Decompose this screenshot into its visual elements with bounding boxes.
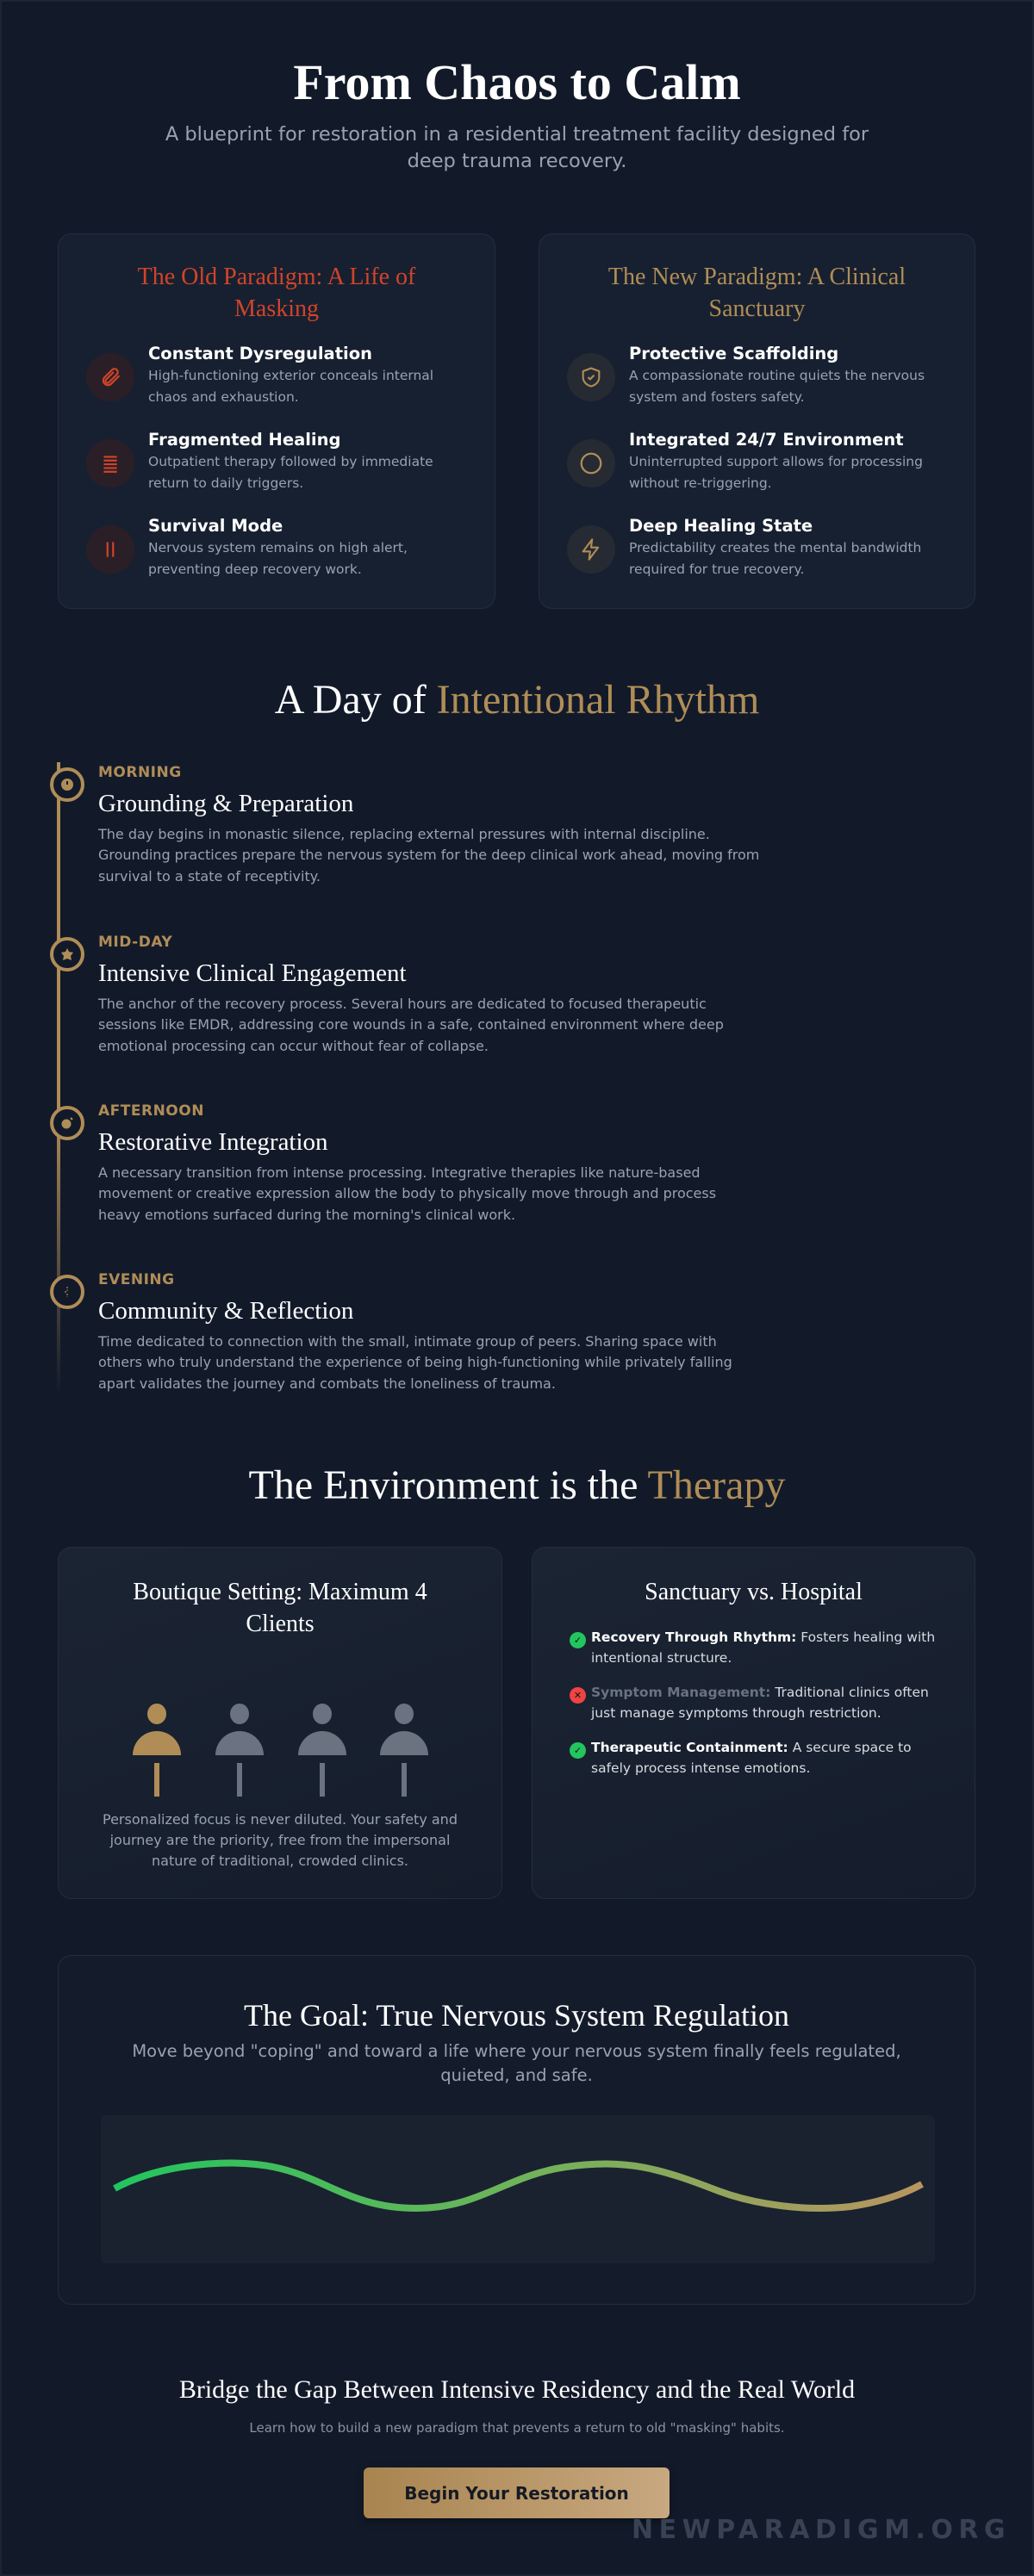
list item: symptom management: Symptom Management: Traditional clinics often just manage symptoms through restriction. — [591, 1685, 929, 1721]
timeline: morning: MORNING — [98, 764, 182, 781]
item: protective scaffolding: Protective Scaffolding — [629, 344, 838, 363]
heading: new paradigm: The New Paradigm: A Clinical Sanctuary — [608, 264, 906, 322]
timeline: evening: Time dedicated to connection with the small, intimate group of peers. Sharing space with others who truly understand the experience of being high-functioning while privately falling apart validates the journey and combats the loneliness of trauma. — [98, 1333, 732, 1392]
panel: new paradigm — [539, 233, 975, 609]
icon: evening dot — [50, 1275, 84, 1309]
timeline: mid-day: Intensive Clinical Engagement — [98, 959, 407, 987]
item: constant dysregulation — [86, 344, 433, 405]
icon: morning dot — [50, 767, 84, 802]
icon: afternoon dot — [50, 1106, 84, 1140]
panel: sanctuary vs hospital — [532, 1547, 975, 1899]
title: From Chaos to Calm — [293, 54, 741, 110]
heading: boutique: Boutique Setting: Maximum 4 Clients — [133, 1579, 427, 1637]
panel: boutique setting — [58, 1547, 502, 1899]
item: constant dysregulation: Constant Dysregulation — [148, 344, 372, 363]
timeline: afternoon — [50, 1102, 716, 1223]
list item: containment: Therapeutic Containment: A secure space to safely process intense emotions. — [591, 1740, 912, 1776]
subtitle: A blueprint for restoration in a residential treatment facility designed for — [165, 123, 869, 146]
heading: sanctuary vs hospital: Sanctuary vs. Hospital — [645, 1579, 863, 1605]
timeline: afternoon: A necessary transition from intense processing. Integrative therapies like nature-based movement or creative expression allow the body to physically move through and process heavy emotions surfaced during the morning's clinical work. — [98, 1164, 716, 1223]
item: survival mode: Survival Mode — [148, 516, 283, 536]
panel: the goal — [58, 1955, 975, 2305]
item: survival mode: Nervous system remains on high alert, preventing deep recovery work. — [148, 540, 408, 577]
icon: stacked lines — [86, 439, 134, 487]
item: deep healing: Predictability creates the mental bandwidth required for true recovery. — [629, 540, 921, 577]
timeline: morning: The day begins in monastic silence, replacing external pressures with internal discipline. Grounding practices prepare the nervous system for the deep clinical work ahead, moving from survival to a state of receptivity. — [98, 826, 759, 885]
item: survival mode — [86, 516, 408, 577]
timeline: mid-day: MID-DAY — [98, 934, 172, 951]
icon: circle — [567, 439, 615, 487]
panel: sanctuary vs hospital: ✓ — [574, 1635, 582, 1645]
text: learn how: Learn how to build a new paradigm that prevents a return to old "masking" habits. — [249, 2420, 785, 2436]
icon: paperclip — [86, 353, 134, 401]
panel: sanctuary vs hospital: ✕ — [574, 1690, 582, 1700]
item: constant dysregulation: High-functioning exterior conceals internal chaos and exhaustion. — [148, 368, 433, 405]
list item: rhythm: Recovery Through Rhythm: Fosters healing with intentional structure. — [591, 1629, 935, 1666]
button: begin your restoration — [364, 2467, 670, 2518]
timeline: evening: Community & Reflection — [98, 1297, 353, 1325]
icon: pause bars — [86, 525, 134, 574]
timeline line — [57, 762, 60, 1395]
timeline: morning: Grounding & Preparation — [98, 790, 353, 817]
item: integrated environment: Uninterrupted support allows for processing without re-triggering. — [629, 454, 923, 491]
item: protective scaffolding: A compassionate routine quiets the nervous system and fosters safety. — [629, 368, 925, 405]
button: begin your restoration: Begin Your Restoration — [404, 2482, 629, 2503]
heading: bridge the gap: Bridge the Gap Between Intensive Residency and the Real World — [179, 2375, 855, 2404]
timeline: afternoon: AFTERNOON — [98, 1102, 204, 1120]
item: integrated environment: Integrated 24/7 Environment — [629, 430, 904, 450]
subtitle: deep trauma recovery. — [408, 150, 626, 172]
heading: day of rhythm: A Day of Intentional Rhythm — [275, 677, 759, 723]
timeline: evening: EVENING — [98, 1271, 175, 1288]
item: deep healing — [567, 516, 921, 577]
item: protective scaffolding — [567, 344, 925, 405]
watermark: NEWPARADIGM.ORG — [632, 2515, 1011, 2545]
subtitle: goal: Move beyond "coping" and toward a life where your nervous system finally feels regulated, quieted, and safe. — [132, 2041, 901, 2085]
chart: regulation wave — [101, 2115, 935, 2263]
icon: shield — [567, 353, 615, 401]
heading: old paradigm: The Old Paradigm: A Life of Masking — [138, 264, 415, 322]
timeline: evening — [50, 1271, 732, 1392]
caption: boutique: Personalized focus is never diluted. Your safety and journey are the priority, free from the impersonal nature of traditional, crowded clinics. — [103, 1811, 458, 1869]
item: fragmented healing — [86, 430, 433, 491]
subtitle — [165, 123, 869, 172]
timeline: morning — [50, 764, 759, 885]
timeline: mid-day — [50, 934, 724, 1054]
timeline: mid-day: The anchor of the recovery process. Several hours are dedicated to focused therapeutic sessions like EMDR, addressing core wounds in a safe, contained environment where deep emotional processing can occur without fear of collapse. — [98, 996, 724, 1054]
panel: sanctuary vs hospital: ✓ — [574, 1745, 582, 1755]
icon: mid-day dot — [50, 937, 84, 971]
item: deep healing: Deep Healing State — [629, 516, 813, 536]
item: fragmented healing: Outpatient therapy followed by immediate return to daily triggers. — [148, 454, 433, 491]
panel: old paradigm — [58, 233, 495, 609]
icon: four people — [133, 1704, 428, 1797]
item: integrated environment — [567, 430, 923, 491]
timeline: afternoon: Restorative Integration — [98, 1128, 328, 1156]
icon: bolt — [567, 525, 615, 574]
heading: environment: The Environment is the Therapy — [249, 1462, 785, 1508]
heading: goal: The Goal: True Nervous System Regulation — [244, 1998, 789, 2033]
item: fragmented healing: Fragmented Healing — [148, 430, 340, 450]
